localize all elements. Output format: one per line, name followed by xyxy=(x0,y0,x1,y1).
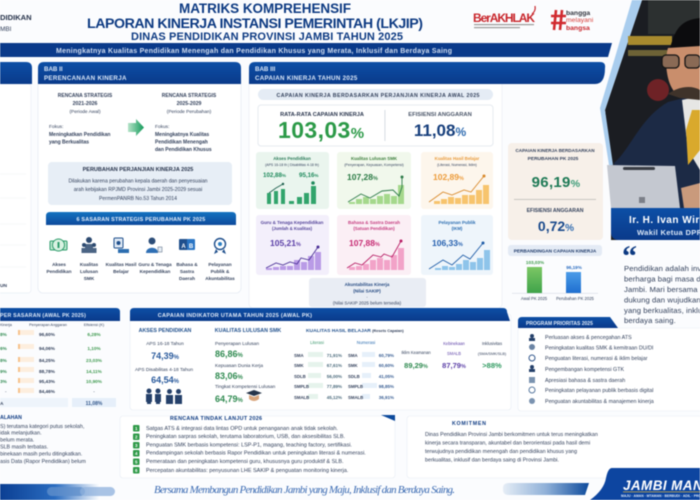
column: akses pendidikan: APS Disabilitas 4-18 Tahun xyxy=(135,367,193,373)
card: capaian perubahan PK: EFISIENSI ANGGARAN xyxy=(527,208,584,214)
sasaran labels: Kualitas Hasil xyxy=(106,262,136,267)
table: capaian per sasaran: 84,25% xyxy=(39,358,56,363)
logo: BerAKHLAK xyxy=(473,6,535,28)
list: program: Perluasan akses & pencegahan ATS xyxy=(545,335,632,341)
panel: permasalahan: binekaan masih perlu ditingkatkan. xyxy=(0,452,82,458)
card: akuntabilitas kinerja: Akuntabilitas Kinerja xyxy=(345,282,390,287)
panel: komitmen: KOMITMEN xyxy=(452,421,486,427)
column: akses pendidikan: APS 16-18 Tahun xyxy=(146,341,184,347)
table: capaian per sasaran: 6% xyxy=(0,346,8,351)
column: kualitas lulusan smk: 86,86% xyxy=(215,349,244,359)
table: capaian per sasaran: - xyxy=(5,389,7,394)
sasaran labels: Lulusan xyxy=(80,269,98,274)
table: capaian per sasaran: 96,60% xyxy=(39,332,56,337)
panel: permasalahan: belum merata. xyxy=(0,438,34,444)
logo: bangga melayani bangsa xyxy=(551,10,594,32)
panel: capaian indikator utama xyxy=(130,308,511,410)
header: BAB II: BAB II xyxy=(44,66,63,73)
table: capaian per sasaran: 23,03% xyxy=(86,358,103,363)
table: capaian per sasaran: 88,78% xyxy=(39,369,56,374)
KPI box xyxy=(258,105,493,146)
column: kualitas hasil belajar: SMPLB xyxy=(348,384,363,389)
table: capaian per sasaran: 10,90% xyxy=(86,379,103,384)
metric: kebinekaan: Kebinekaan xyxy=(443,341,466,346)
column: rencana strategis awal: Fokus: xyxy=(49,124,63,130)
icon: bahasa dan sastra xyxy=(179,239,195,250)
table: capaian per sasaran: 8% xyxy=(0,358,8,363)
card: capaian perubahan PK: PERUBAHAN PK 2025 xyxy=(528,156,579,162)
card: capaian perubahan PK: CAPAIAN KINERJA BERDASARKAN xyxy=(515,148,595,153)
table: capaian per sasaran: 94,06% xyxy=(39,346,56,351)
list: rencana: Penguatan SMK berbasis kompetensi: LSP-P1, magang, teaching factory, sertifikasi. xyxy=(146,442,352,448)
column: kualitas hasil belajar: SMK xyxy=(348,363,358,368)
list: rencana: 5 xyxy=(135,460,138,464)
column: kualitas hasil belajar: 36,91% xyxy=(379,395,394,400)
list: rencana: Peningkatan sarpras sekolah, terutama laboratorium, USB, dan aksesibilitas SLB. xyxy=(146,434,345,440)
column: kualitas lulusan smk: 64,79% xyxy=(215,394,244,404)
sasaran labels: Bahasa & xyxy=(176,262,198,267)
card: akses pendidikan: 95,16% xyxy=(299,172,318,179)
KPI box: 11,08% xyxy=(414,121,466,140)
subheading: capaian kinerja awal xyxy=(258,89,493,100)
column: kualitas hasil belajar: 98,85% xyxy=(379,384,394,389)
list: rencana: 4 xyxy=(135,451,138,456)
column: kualitas hasil belajar: SMALB xyxy=(348,395,363,400)
panel: program prioritas xyxy=(518,317,700,411)
card: guru dan tenaga kependidikan: (Jumlah & Kualitas) xyxy=(272,226,313,231)
column: kualitas hasil belajar: 60,60% xyxy=(379,363,394,368)
card: kualitas hasil belajar: Kualitas Hasil Belajar xyxy=(435,156,480,161)
column: kualitas hasil belajar: SMA xyxy=(294,353,304,358)
list: program: Apresiasi bahasa & sastra daerah xyxy=(545,378,625,384)
column: kualitas hasil belajar: 56,00% xyxy=(327,374,342,379)
table: capaian per sasaran: Penyerapan Anggaran xyxy=(29,323,67,327)
arrow xyxy=(128,119,144,136)
column: kualitas hasil belajar: 41,05% xyxy=(379,374,394,379)
chart: perbandingan capaian kinerja: 96,19% xyxy=(566,265,582,270)
sasaran labels xyxy=(46,262,235,281)
chart: perbandingan capaian kinerja: 103,03% xyxy=(526,260,544,265)
footer band left xyxy=(0,484,115,500)
sasaran labels: Kualitas xyxy=(80,262,99,267)
list: rencana: Percepatan akuntabilitas: penyusunan LHE SAKIP & penguatan monitoring kinerja. xyxy=(146,468,349,474)
header: capaian indikator xyxy=(130,308,510,321)
box: perubahan perjanjian kinerja: PERUBAHAN PERJANJIAN KINERJA 2025 xyxy=(83,167,193,173)
sasaran labels: Sastra xyxy=(180,269,195,274)
heading: 6 sasaran: 6 SASARAN STRATEGIS PERUBAHAN PK 2025 xyxy=(77,217,205,223)
card: capaian perubahan PK: 96,19% xyxy=(532,174,581,191)
column: kualitas lulusan smk: KUALITAS LULUSAN SMK xyxy=(215,328,281,334)
list: rencana: 1 xyxy=(135,426,138,431)
header: BAB II xyxy=(38,62,241,84)
column: rencana strategis perubahan xyxy=(155,93,217,153)
table: capaian per sasaran: 8% xyxy=(0,332,8,337)
list: rencana: Pendampingan sekolah berbasis Rapor Pendidikan untuk peningkatan literasi & numerasi. xyxy=(146,450,366,456)
list: rencana: 6 xyxy=(135,468,138,473)
table: capaian per sasaran: 95,43% xyxy=(39,379,56,384)
card: akuntabilitas kinerja xyxy=(309,278,426,307)
card: pelayanan publik: 106,33% xyxy=(432,238,463,248)
column: rencana strategis perubahan: dan Pendidikan Khusus xyxy=(155,147,212,153)
KPI box: 103,03% xyxy=(278,117,364,143)
chart: perbandingan capaian kinerja xyxy=(508,245,602,301)
column: akses pendidikan xyxy=(135,328,193,404)
card: kualitas lulusan smk xyxy=(337,152,411,209)
quote: berdaya saing. xyxy=(624,316,676,325)
sasaran labels: Kependidikan xyxy=(140,269,171,274)
quote: “ xyxy=(622,240,637,273)
sasaran labels: Daerah xyxy=(179,276,195,281)
panel: komitmen: Dinas Pendidikan Provinsi Jambi berkomitmen untuk terus meningkatkan xyxy=(425,432,598,438)
column: kualitas hasil belajar: 45,12% xyxy=(327,395,342,400)
column: akses pendidikan: AKSES PENDIDIKAN xyxy=(139,328,192,334)
table: capaian per sasaran xyxy=(0,308,120,407)
card: capaian perubahan PK xyxy=(508,143,603,240)
icon: pelayanan publik xyxy=(214,238,226,254)
icon: guru dan tenaga kependidikan xyxy=(146,238,162,253)
box: perubahan perjanjian kinerja: PermenPANRB No.53 Tahun 2014 xyxy=(99,196,177,202)
sasaran labels: Akuntabilitas xyxy=(205,276,235,281)
card: akses pendidikan xyxy=(256,152,329,209)
card: akuntabilitas kinerja: (Nilai SAKIP) xyxy=(353,288,381,294)
icon: bahasa dan sastra: A xyxy=(181,244,186,250)
table: capaian per sasaran: 14,11% xyxy=(86,369,103,374)
header: BAB III: BAB III xyxy=(255,66,276,73)
metric: iklim keamanan: 89,29% xyxy=(404,361,428,370)
panel: komitmen: kinerja secara transparan, akuntabel dan berorientasi pada hasil demi xyxy=(425,440,590,446)
icon: akses pendidikan xyxy=(50,239,67,251)
metric: kebinekaan: 87,79% xyxy=(442,361,466,370)
card: bahasa dan sastra daerah: Bahasa & Sastra Daerah xyxy=(348,220,400,225)
column: rencana strategis perubahan: Fokus: xyxy=(155,124,169,130)
logo: bangga melayani bangsa: bangga xyxy=(566,10,590,17)
column: kualitas lulusan smk: Tingkat Kompetensi Lulusan xyxy=(215,384,276,390)
box: perubahan perjanjian kinerja: Dilakukan karena perubahan kepala daerah dan penyesuaian xyxy=(68,178,208,184)
logo: BerAKHLAK: BerAKHLAK xyxy=(473,11,535,25)
column: kualitas lulusan smk: Penyerapan Lulusan xyxy=(215,341,259,347)
column: rencana strategis awal xyxy=(49,93,113,146)
table: capaian per sasaran: 11,08% xyxy=(86,401,103,407)
column: akses pendidikan: 64,54% xyxy=(151,375,180,385)
heading: 6 sasaran xyxy=(46,212,236,225)
column: rencana strategis perubahan: RENCANA STRATEGIS xyxy=(162,93,217,99)
nameplate xyxy=(611,208,700,240)
sasaran labels: Pendidikan xyxy=(46,269,72,274)
panel: permasalahan: S) terutama kategori putus sekolah, xyxy=(0,424,84,430)
top-left logo text: MBI xyxy=(0,26,12,33)
list: rencana: 2 xyxy=(135,434,138,440)
column: rencana strategis awal: 2021-2026 xyxy=(73,101,98,107)
card: kualitas lulusan smk: 107,28% xyxy=(347,172,378,182)
metric: inklusivitas: Inklusivitas xyxy=(482,341,502,346)
card: bahasa dan sastra daerah xyxy=(337,215,411,275)
column: kualitas hasil belajar: SDLB xyxy=(348,374,360,379)
chart: perbandingan capaian kinerja: Awal PK 2025 xyxy=(521,296,548,301)
slogan: Bersama Membangun Pendidikan Jambi yang Maju, Inklusif dan Berdaya Saing. xyxy=(154,484,455,496)
KPI box: EFISIENSI ANGGARAN xyxy=(408,112,472,118)
list: program: Pengembangan kompetensi GTK xyxy=(545,367,624,373)
logo: bangga melayani bangsa: bangsa xyxy=(566,25,590,32)
header: BAB III xyxy=(249,62,605,84)
card: kualitas lulusan smk: Kualitas Lulusan SMK xyxy=(351,156,398,161)
list: rencana: Pemerataan dan peningkatan kompetensi guru, khususnya guru produktif & SLB. xyxy=(146,459,344,465)
quote xyxy=(622,240,700,325)
column: kualitas lulusan smk: Kepuasan Dunia Kerja xyxy=(215,363,263,369)
card: pelayanan publik xyxy=(421,215,493,275)
column: rencana strategis awal: (Periode Awal) xyxy=(69,109,101,115)
panel: permasalahan: SLB masih terbatas. xyxy=(0,444,48,450)
card: kualitas hasil belajar: 102,89% xyxy=(433,172,464,182)
footer brand: jambi mantap: MAJU · AMAN · MTAMAN · BERBUDI · ADIL · PRO xyxy=(621,494,700,498)
panel: komitmen xyxy=(407,416,700,478)
column: kualitas hasil belajar: Literasi xyxy=(310,340,324,345)
table: capaian per sasaran: 84,46% xyxy=(39,389,56,394)
column: rencana strategis perubahan: Meningkatnya Kualitas xyxy=(155,132,209,138)
column: rencana strategis awal: yang Berkualitas xyxy=(49,140,89,146)
column: kualitas hasil belajar: Numerasi xyxy=(357,340,375,345)
panel: BAB I: UN xyxy=(0,283,7,289)
card: akses pendidikan: 102,88% xyxy=(263,172,286,179)
column: rencana strategis awal: RENCANA STRATEGIS xyxy=(58,93,113,99)
column: kualitas hasil belajar: SDLB xyxy=(294,374,306,379)
panel: rencana tindak lanjut: RENCANA TINDAK LANJUT 2026 xyxy=(170,416,262,422)
panel: permasalahan xyxy=(0,415,86,465)
top-left logo text: DIDIKAN xyxy=(0,13,32,22)
title: LAPORAN KINERJA INSTANSI PEMERINTAH (LKJIP) xyxy=(87,16,423,32)
column: kualitas lulusan smk xyxy=(215,328,281,404)
table: capaian per sasaran: 3% xyxy=(0,379,8,384)
table: capaian per sasaran: A xyxy=(0,401,4,407)
table: capaian per sasaran: PER SASARAN (AWAL PK 2025) xyxy=(0,313,86,319)
top-left logo text xyxy=(0,13,32,33)
icon: kualitas hasil belajar xyxy=(114,238,129,253)
list: program xyxy=(529,334,654,405)
card: akses pendidikan: (APS 16-18 th | Disabilitas 4-18 th) xyxy=(265,163,319,167)
header: BAB III: CAPAIAN KINERJA TAHUN 2025 xyxy=(255,75,358,82)
card: guru dan tenaga kependidikan xyxy=(256,215,329,275)
list: program: Peningkatan pelayanan publik berbasis digital xyxy=(545,388,653,394)
title: DINAS PENDIDIKAN PROVINSI JAMBI TAHUN 2025 xyxy=(131,31,403,43)
table: capaian per sasaran: 1,10% xyxy=(87,346,101,351)
panel: komitmen: terwujudnya pendidikan menengah dan pendidikan khusus yang xyxy=(425,449,577,455)
banner: vision: Meningkatnya Kualitas Pendidikan Menengah dan Pendidikan Khusus yang Merata, Inklusif dan Berdaya Saing xyxy=(56,48,452,55)
metric: iklim keamanan: Iklim Keamanan xyxy=(401,350,431,355)
card: bahasa dan sastra daerah: 107,88% xyxy=(349,238,380,248)
table: capaian per sasaran: - xyxy=(93,389,95,394)
card: pelayanan publik: (IKM) xyxy=(452,226,463,231)
sasaran labels: SMK xyxy=(84,276,95,281)
panel: BAB I xyxy=(0,62,32,293)
panel: BAB III xyxy=(249,62,605,308)
sasaran labels: Publik & xyxy=(211,269,230,274)
card: pelayanan publik: Pelayanan Publik xyxy=(438,220,476,225)
metric: iklim keamanan xyxy=(401,350,431,370)
card: akuntabilitas kinerja: - xyxy=(366,294,368,299)
footer brand: jambi mantap xyxy=(503,468,700,500)
list: program: Penguatan literasi, numerasi & iklim belajar xyxy=(545,356,648,362)
card: capaian perubahan PK: 0,72% xyxy=(538,218,574,234)
metric: inklusivitas: >88% xyxy=(482,361,502,370)
card: guru dan tenaga kependidikan: Guru & Tenaga Kependidikan xyxy=(261,220,324,225)
box: perubahan perjanjian kinerja: arah kebijakan RPJMD Provinsi Jambi 2025-2029 sesuai xyxy=(74,187,202,193)
title xyxy=(87,1,423,43)
column: kualitas hasil belajar: SMA xyxy=(348,353,358,358)
card: akses pendidikan: Akses Pendidikan xyxy=(273,156,311,161)
column: kualitas lulusan smk: 83,06% xyxy=(215,371,244,381)
header: capaian indikator: CAPAIAN INDIKATOR UTAMA TAHUN 2025 (AWAL PK) xyxy=(158,313,312,319)
list: program: Penguatan akuntabilitas & manajemen kinerja xyxy=(545,399,654,405)
column: kualitas hasil belajar: 60,79% xyxy=(379,353,394,358)
title: MATRIKS KOMPREHENSIF xyxy=(179,1,351,16)
sasaran labels: Pelayanan xyxy=(208,262,232,267)
card: akuntabilitas kinerja: (Nilai SAKIP 2025 belum tersedia) xyxy=(333,300,402,306)
table: capaian per sasaran: Kinerja xyxy=(0,323,13,327)
column: kualitas hasil belajar: SMPLB xyxy=(294,384,309,389)
panel: BAB II xyxy=(38,62,241,293)
tab: program prioritas xyxy=(518,317,618,328)
sasaran labels: Guru & Tenaga xyxy=(138,262,172,267)
metric: inklusivitas xyxy=(478,341,507,370)
quote: dukung dan wujudkan xyxy=(624,296,700,304)
list: rencana xyxy=(133,425,366,474)
subheading: capaian kinerja awal: CAPAIAN KINERJA BERDASARKAN PERJANJIAN KINERJA AWAL 2025 xyxy=(276,93,480,99)
panel: rencana tindak lanjut xyxy=(120,415,395,478)
panel: permasalahan: idak melanjutkan. xyxy=(0,430,42,436)
column: kualitas hasil belajar xyxy=(294,328,404,400)
list: program: Peningkatan kualitas SMK & kemitraan DU/DI xyxy=(545,346,653,352)
panel: komitmen: berkualitas, inklusif dan berdaya saing di Provinsi Jambi. xyxy=(425,458,559,464)
panel: permasalahan: asis Data (Rapor Pendidikan) belum xyxy=(0,459,86,465)
box: perubahan perjanjian kinerja xyxy=(48,162,232,205)
column: kualitas hasil belajar: SMK xyxy=(294,363,304,368)
chart: perbandingan capaian kinerja: PERBANDINGAN CAPAIAN KINERJA xyxy=(514,248,597,254)
column: rencana strategis perubahan: Pendidikan Menengah xyxy=(155,140,208,146)
photo: speaker portrait xyxy=(600,0,700,240)
column: kualitas hasil belajar: SMALB xyxy=(294,395,309,400)
column: rencana strategis perubahan: (Periode Perubahan) xyxy=(167,109,212,115)
table: capaian per sasaran: Efisiensi (K) xyxy=(84,323,105,327)
column: rencana strategis perubahan: 2025-2029 xyxy=(177,101,202,107)
banner: vision xyxy=(0,43,612,57)
card: kualitas hasil belajar xyxy=(421,152,493,209)
card: bahasa dan sastra daerah: (Satuan Pendidikan) xyxy=(353,226,395,231)
icon: bahasa dan sastra: B xyxy=(189,244,194,250)
logo: bangga melayani bangsa: melayani xyxy=(566,17,594,24)
card: kualitas lulusan smk: (Penyerapan, Kepuasan, Kompetensi) xyxy=(344,163,404,167)
column: rencana strategis awal: Meningkatkan Pendidikan xyxy=(49,132,110,138)
metric: kebinekaan: SMALB xyxy=(447,351,461,356)
metric: inklusivitas: (SMA/SMK/SLB) xyxy=(478,352,507,356)
tab: program prioritas: PROGRAM PRIORITAS 2025 xyxy=(526,321,593,327)
list: rencana: Satgas ATS & integrasi data lintas OPD untuk penanganan anak tidak sekolah. xyxy=(146,426,338,432)
sasaran labels: Akses xyxy=(52,262,66,267)
card: guru dan tenaga kependidikan: 105,21% xyxy=(270,238,301,248)
column: kualitas hasil belajar: 71,91% xyxy=(327,353,342,358)
table: capaian per sasaran: 9% xyxy=(0,369,8,374)
panel: permasalahan: ALAHAN xyxy=(0,415,22,421)
sasaran labels: Belajar xyxy=(113,269,129,274)
column: akses pendidikan: 74,39% xyxy=(151,351,180,361)
column: kualitas hasil belajar: KUALITAS HASIL BELAJAR (Resets Capaian) xyxy=(306,328,404,334)
chart: perbandingan capaian kinerja: Perubahan PK 2025 xyxy=(556,296,595,301)
card: kualitas hasil belajar: (Literasi, Numerasi, Iklim) xyxy=(437,163,477,167)
header: BAB II: PERENCANAAN KINERJA xyxy=(44,75,127,82)
KPI box: RATA-RATA CAPAIAN KINERJA xyxy=(280,112,364,118)
table: capaian per sasaran: 6,28% xyxy=(87,332,101,337)
column: kualitas hasil belajar: 67,61% xyxy=(327,363,342,368)
icon: kualitas lulusan xyxy=(82,237,96,253)
metric: kebinekaan xyxy=(442,341,466,370)
column: kualitas hasil belajar: 77,89% xyxy=(327,384,342,389)
list: rencana: 3 xyxy=(135,443,138,448)
